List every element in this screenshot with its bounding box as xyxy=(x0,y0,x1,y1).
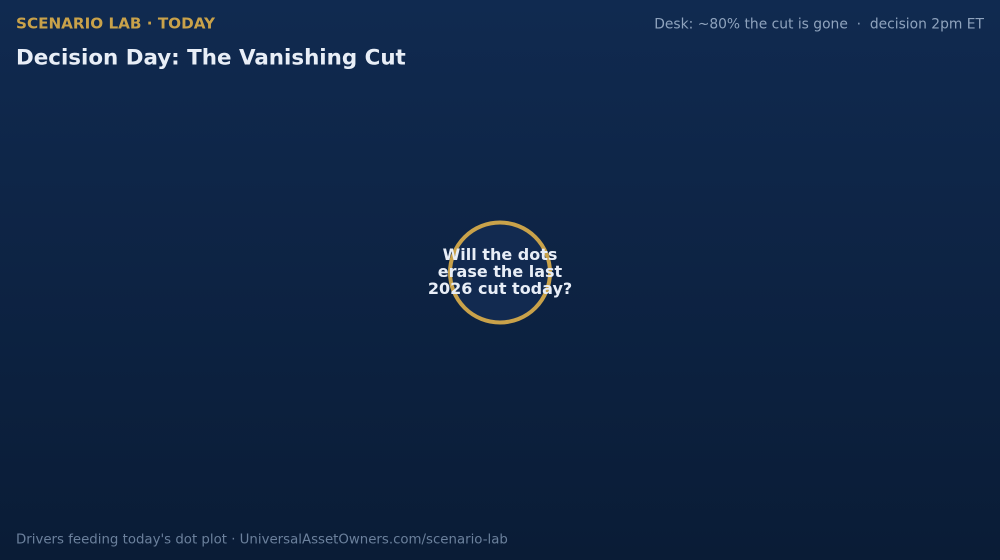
node question text: erase the last xyxy=(438,262,563,281)
desk note: Desk: ~80% the cut is gone · decision 2pm ET xyxy=(654,16,985,32)
title: Decision Day: The Vanishing Cut xyxy=(16,46,406,70)
node question text: 2026 cut today? xyxy=(428,279,572,298)
footer: Drivers feeding today's dot plot · UniversalAssetOwners.com/scenario-lab xyxy=(16,532,508,548)
central question node xyxy=(428,222,572,322)
node question text: Will the dots xyxy=(443,245,557,264)
node circle xyxy=(450,222,550,322)
kicker: SCENARIO LAB · TODAY xyxy=(16,14,216,32)
